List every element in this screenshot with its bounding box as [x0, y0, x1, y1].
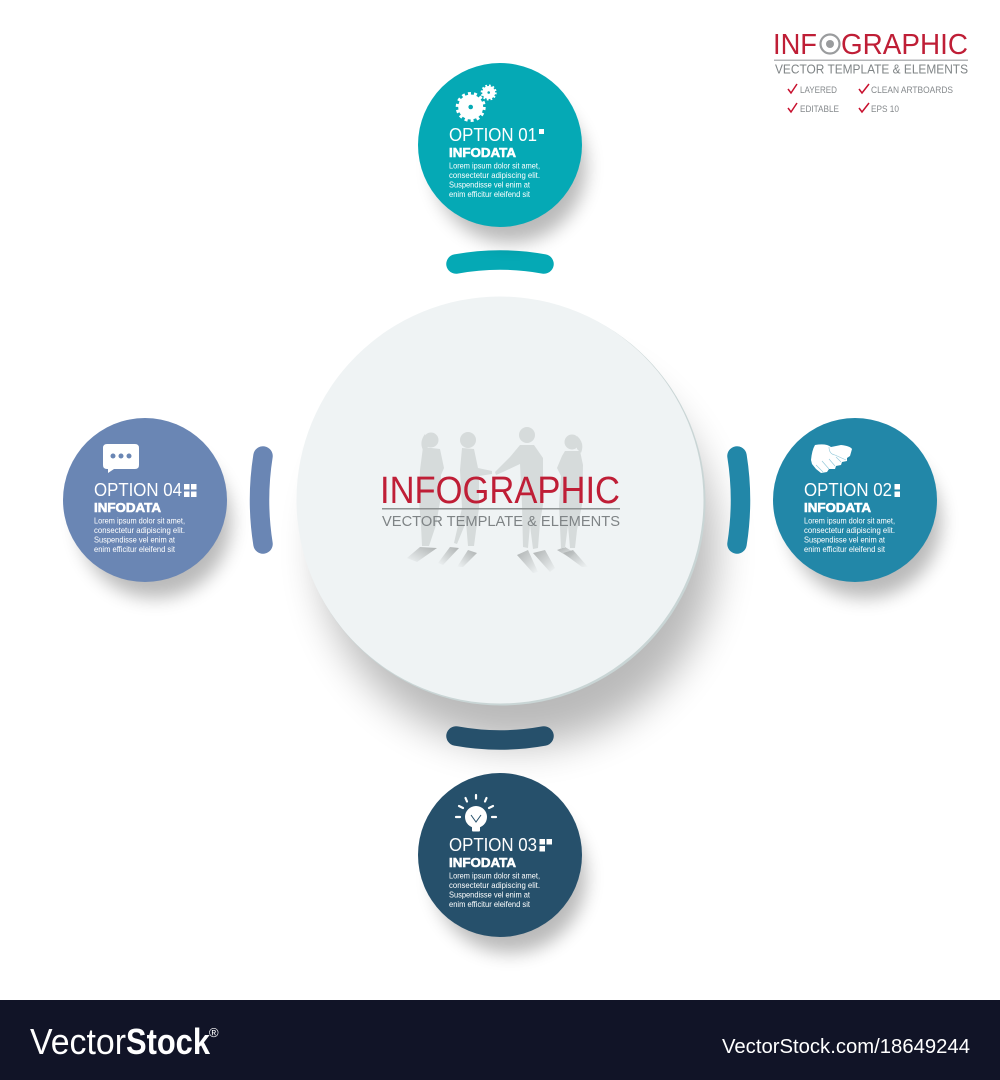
top arc connector: [456, 260, 544, 264]
footer brand: [30, 1021, 219, 1062]
icon: speech bubble: [103, 444, 139, 473]
center title: INFOGRAPHIC: [380, 470, 620, 512]
center title: [380, 470, 620, 530]
feature checklist: EDITABLE: [800, 104, 839, 114]
description: Lorem ipsum dolor sit amet,: [449, 870, 540, 880]
bottom arc connector: [456, 736, 544, 740]
marker squares: [540, 839, 552, 852]
center title: VECTOR TEMPLATE & ELEMENTS: [382, 513, 620, 530]
left arc connector: [260, 456, 263, 544]
description: Lorem ipsum dolor sit amet,: [449, 160, 540, 170]
description: [449, 160, 540, 199]
description: [804, 516, 895, 554]
panel: option 01: [418, 63, 586, 243]
description: enim efficitur eleifend sit: [449, 189, 531, 199]
right arc connector: [737, 456, 740, 544]
description: enim efficitur eleifend sit: [449, 899, 531, 909]
feature checklist: LAYERED: [800, 85, 837, 95]
marker squares: [539, 129, 544, 134]
logo: infographic top right: [773, 29, 968, 76]
description: consectetur adipiscing elit.: [449, 880, 540, 890]
description: Lorem ipsum dolor sit amet,: [94, 516, 185, 526]
description: Suspendisse vel enim at: [94, 534, 176, 544]
business people silhouettes: [407, 427, 588, 573]
description: Suspendisse vel enim at: [449, 890, 531, 900]
feature checklist: CLEAN ARTBOARDS: [871, 85, 953, 95]
option 04 heading: OPTION 04: [94, 480, 182, 500]
infodata label: INFODATA: [449, 145, 517, 160]
option 03 heading: OPTION 03: [449, 835, 537, 855]
description: enim efficitur eleifend sit: [804, 544, 886, 554]
logo: infographic top right: VECTOR TEMPLATE & ELEMENTS: [775, 62, 968, 76]
description: consectetur adipiscing elit.: [449, 170, 540, 180]
logo: infographic top right: INF: [773, 29, 817, 61]
description: Suspendisse vel enim at: [449, 180, 531, 190]
panel: option 04: [63, 418, 231, 598]
infodata label: INFODATA: [449, 855, 517, 870]
feature checklist: EPS 10: [871, 104, 899, 114]
footer brand: Stock: [126, 1021, 211, 1062]
footer brand: ®: [209, 1025, 219, 1040]
footer bar: [0, 1000, 1000, 1080]
infodata label: INFODATA: [804, 500, 872, 515]
option 02 heading: OPTION 02: [804, 480, 892, 500]
infodata label: INFODATA: [94, 500, 162, 515]
footer image id: VectorStock.com/18649244: [722, 1036, 970, 1058]
icon: handshake: [811, 444, 852, 473]
center circle: [296, 296, 706, 706]
center circle shadow: [320, 350, 716, 746]
option 01 heading: OPTION 01: [449, 125, 537, 145]
description: enim efficitur eleifend sit: [94, 544, 176, 554]
footer brand: Vector: [30, 1021, 126, 1062]
icon: target letter O: [820, 34, 840, 54]
description: Lorem ipsum dolor sit amet,: [804, 516, 895, 526]
description: [449, 870, 540, 909]
logo: infographic top right: GRAPHIC: [841, 29, 968, 61]
marker squares: [184, 484, 196, 497]
marker squares: [894, 484, 900, 497]
description: Suspendisse vel enim at: [804, 534, 886, 544]
description: [94, 516, 185, 554]
icon: gears: [457, 86, 496, 120]
description: consectetur adipiscing elit.: [804, 525, 895, 535]
icon: light bulb: [456, 795, 496, 832]
panel: option 02: [773, 418, 941, 598]
feature checklist: [788, 84, 953, 114]
description: consectetur adipiscing elit.: [94, 525, 185, 535]
panel: option 03: [418, 773, 586, 953]
